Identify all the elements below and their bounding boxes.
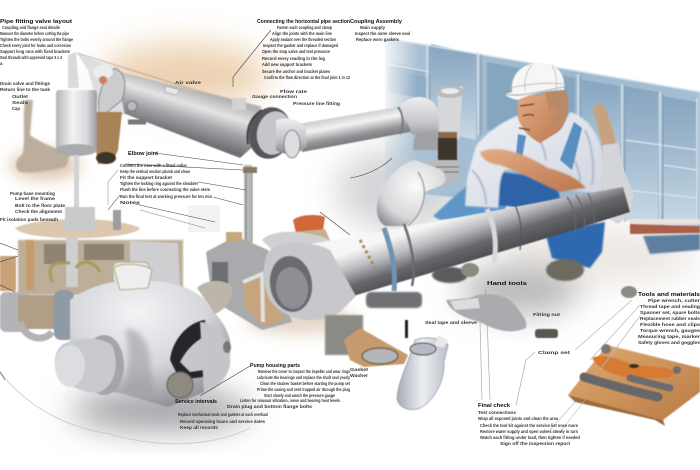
text block: tool labels: Washer: [350, 373, 368, 378]
text block: pump notes: [175, 363, 350, 430]
text block: centre notes: Notes: [120, 200, 141, 205]
text block: left note: Drain valve and fittings: [0, 81, 50, 86]
right end vertical fitting: [602, 143, 634, 224]
worker boot and lower leg: [545, 222, 605, 281]
text block: top left: Tighten the bolts evenly around the flange: [0, 37, 73, 42]
text block: bottom notes: Sign off the inspection report: [500, 441, 571, 446]
text block: top centre: Secure the anchor and bracket plates: [262, 69, 330, 74]
text block: left lower: Check the alignment: [15, 209, 63, 214]
pipe clamps: [384, 228, 395, 291]
beige elbow fitting: [16, 100, 70, 173]
text block: centre notes: [120, 151, 212, 205]
bronze fitting: [96, 112, 122, 164]
leader lines: [0, 30, 640, 432]
text block: small upper labels: Gauge connection: [252, 94, 297, 99]
text block: left note: [0, 81, 51, 111]
pump neck: [197, 281, 232, 314]
stop valve ghost: [188, 205, 220, 232]
left cylinder and fittings: [16, 52, 122, 218]
leader wires behind pipe: [350, 158, 392, 178]
text block: right tools note: Thread tape and sealing: [640, 304, 700, 309]
text block: pump notes: Prime the casing and vent trapped air through the plug: [257, 387, 350, 392]
valve boss: [93, 65, 246, 111]
text block: bottom notes: Test connections: [478, 410, 516, 415]
open pipe end: [264, 243, 356, 320]
pipe supports: [325, 263, 479, 355]
text block: right tools note: Measuring tape, marker: [638, 334, 700, 339]
text block: left lower: Bolt to the floor plate: [15, 203, 66, 208]
worker overall strap: [516, 122, 582, 170]
text block: top left: Pipe fitting valve layout: [0, 19, 72, 25]
text block: right tools note: Torque wrench, gauges: [640, 328, 700, 333]
text block: centre notes: Connect the riser with a fitted collar: [120, 163, 187, 168]
text block: pump notes: Drain plug and bottom flange bolts: [227, 404, 313, 409]
text block: left note: Return line to the tank: [0, 87, 51, 92]
text block: top right: Inspect the outer sleeve seal: [355, 31, 410, 36]
text block: left lower: Fit isolation pads beneath: [0, 217, 58, 222]
text block: top centre: Fasten each coupling and clamp: [277, 25, 332, 30]
text block: bottom notes: [478, 403, 580, 446]
text block: small upper labels: Air valve: [175, 80, 202, 85]
text block: pump notes: Keep all records: [180, 425, 219, 430]
text block: top centre: Add new support brackets: [262, 62, 312, 67]
bottle tool: [397, 320, 448, 410]
text block: right tools note: Pipe wrench, cutter: [648, 298, 700, 303]
text block: tool labels: [350, 281, 571, 378]
small coupling: [535, 329, 558, 338]
text block: top centre: Apply sealant over the threaded section: [270, 37, 336, 42]
panel: tiled blue wall: [385, 38, 700, 228]
text block: tool labels: Seal tape and sleeve: [425, 320, 478, 325]
worker shirt: [465, 112, 604, 208]
text block: top left: Support long runs with fixed brackets: [0, 49, 70, 54]
orange tool: [592, 356, 677, 378]
text block: right tools note: Replacement rubber seals: [640, 316, 700, 321]
lower big pipe: [264, 187, 630, 320]
central machine box: [206, 232, 292, 330]
text block: left note: Outlet: [12, 94, 29, 99]
text block: right tools note: Safety gloves and goggles: [638, 340, 700, 345]
gray coil front: [584, 377, 658, 397]
worker hard hat: [505, 63, 565, 100]
text block: top left: Check every joint for leaks and corrosion: [0, 43, 71, 48]
text block: top left: Seal threads with approved tape 3 x 4: [0, 55, 62, 60]
pump side coupling: [0, 290, 74, 340]
text block: top left: a: [0, 61, 3, 66]
text block: pump notes: Lubricate the bearings and replace the shaft seal yearly: [257, 375, 350, 380]
text block: top right: [350, 19, 410, 42]
text block: left note: Cap: [12, 106, 20, 111]
pump body: [70, 281, 230, 407]
text block: top centre: Connecting the horizontal pipe section: [257, 19, 350, 25]
text block: top left: Measure the diameter before cutting the pipe: [0, 31, 69, 36]
pipe flange collar: [99, 68, 125, 118]
text block: top right: Main supply: [360, 25, 385, 30]
pump end cap: [55, 335, 124, 395]
text block: centre notes: Keep the vertical section plumb and clean: [120, 169, 190, 174]
text block: top centre: Align the joints with the main line: [272, 31, 332, 36]
text block: right tools note: [638, 292, 700, 345]
text block: centre notes: Run the final test at working pressure for ten min: [120, 194, 212, 199]
text block: top centre: [257, 19, 350, 80]
wooden tool board: [568, 344, 700, 426]
tool tray under pipe: [344, 328, 408, 367]
text block: centre notes: Elbow joint: [128, 151, 158, 157]
text block: top centre: Confirm the flow direction at the final joint 1 in 12: [264, 75, 350, 80]
text block: left lower: Pump base mounting: [10, 191, 55, 196]
text block: pump notes: Replace mechanical seals and gaskets at each overhaul: [178, 412, 268, 417]
upper main pipe: [77, 53, 268, 158]
text block: left note: Seals: [12, 100, 29, 105]
pump top port: [114, 264, 152, 290]
pump: [0, 264, 232, 407]
vertical support rods: [243, 165, 257, 243]
worker: [433, 63, 605, 281]
text block: pump notes: Clean the strainer basket before starting the pump set: [260, 381, 350, 386]
text block: tool labels: Fitting nut: [533, 312, 561, 317]
text block: right tools note: Flexible hose and clips: [640, 322, 700, 327]
pump body shading: [122, 329, 155, 395]
worker legs: [433, 178, 510, 220]
sight glass cylinder: [405, 86, 464, 185]
bulb elbow fitting: [377, 160, 446, 226]
text block: centre notes: Flush the line before connecting the valve stem: [120, 187, 210, 192]
text block: bottom notes: Final check: [478, 403, 510, 409]
text block: centre notes: Fit the support bracket: [120, 175, 173, 180]
worker shirt folds: [472, 130, 593, 204]
text block: left lower: [0, 191, 66, 222]
text block: centre notes: Tighten the locking ring against the shoulder: [120, 181, 198, 186]
text block: small upper labels: Pressure line fitting: [293, 101, 340, 106]
washer: [621, 286, 637, 298]
text block: top right: Coupling Assembly: [350, 19, 402, 25]
text block: top centre: Inspect the gasket and replace if damaged: [263, 43, 338, 48]
text block: top centre: Record every reading in the log: [262, 56, 325, 61]
text block: right tools note: Spanner set, spare bolts: [640, 310, 700, 315]
text block: bottom notes: Watch each fitting under load, then tighten if needed: [480, 435, 580, 440]
text block: top left: [0, 19, 73, 66]
text block: bottom notes: Restore water supply and open valves slowly in turn: [480, 429, 578, 434]
hand tool on floor: [446, 294, 526, 331]
second pipe and elbow: [298, 97, 441, 152]
text block: pump notes: Listen for unusual vibration, noise and bearing heat levels: [240, 398, 340, 403]
text block: left lower: Level the frame: [15, 196, 56, 201]
text block: small upper labels: Flow rate: [280, 89, 308, 94]
pump door: [200, 322, 230, 394]
text block: small upper labels: [175, 80, 340, 106]
text block: pump notes: Start slowly and watch the pressure gauge: [264, 393, 335, 398]
worker forearm: [480, 149, 586, 192]
text block: tool labels: Gasket: [350, 367, 369, 372]
white cylinder: [68, 52, 79, 88]
icon: wall pipe behind worker: [593, 104, 615, 146]
text block: top left: Coupling and flange seal details: [2, 25, 60, 30]
round disc top: [15, 219, 140, 238]
right pipe-wrench on floor: [630, 219, 700, 254]
worker overalls: [498, 172, 560, 208]
machinery under disc: [0, 207, 183, 295]
text block: pump notes: Pump housing parts: [250, 363, 300, 369]
text block: pump notes: Record operating hours and service dates: [180, 419, 265, 424]
pump dark opening: [170, 320, 210, 380]
worker head: [518, 90, 568, 143]
text block: top centre: Open the stop valve and test pressure: [262, 49, 330, 54]
text block: tool labels: Hand tools: [487, 281, 527, 287]
text block: pump notes: Remove the cover to inspect the impeller and wear rings: [258, 369, 350, 374]
text block: pump notes: Service intervals: [175, 399, 217, 405]
orange valve cap: [262, 215, 340, 254]
text block: right tools note: Tools and materials: [638, 292, 700, 298]
large pipe coupling ring: [244, 103, 307, 163]
bolts: [128, 120, 146, 124]
text block: bottom notes: Wrap all exposed joints and clean the area: [478, 416, 558, 421]
text block: top right: Replace worn gaskets: [356, 37, 399, 42]
ring tool: [362, 348, 398, 364]
text block: bottom notes: Check the tool kit against the service list once more: [480, 423, 578, 428]
pump drain spool: [167, 372, 193, 398]
text block: tool labels: Clamp set: [538, 350, 571, 355]
gray coil back: [630, 378, 670, 388]
